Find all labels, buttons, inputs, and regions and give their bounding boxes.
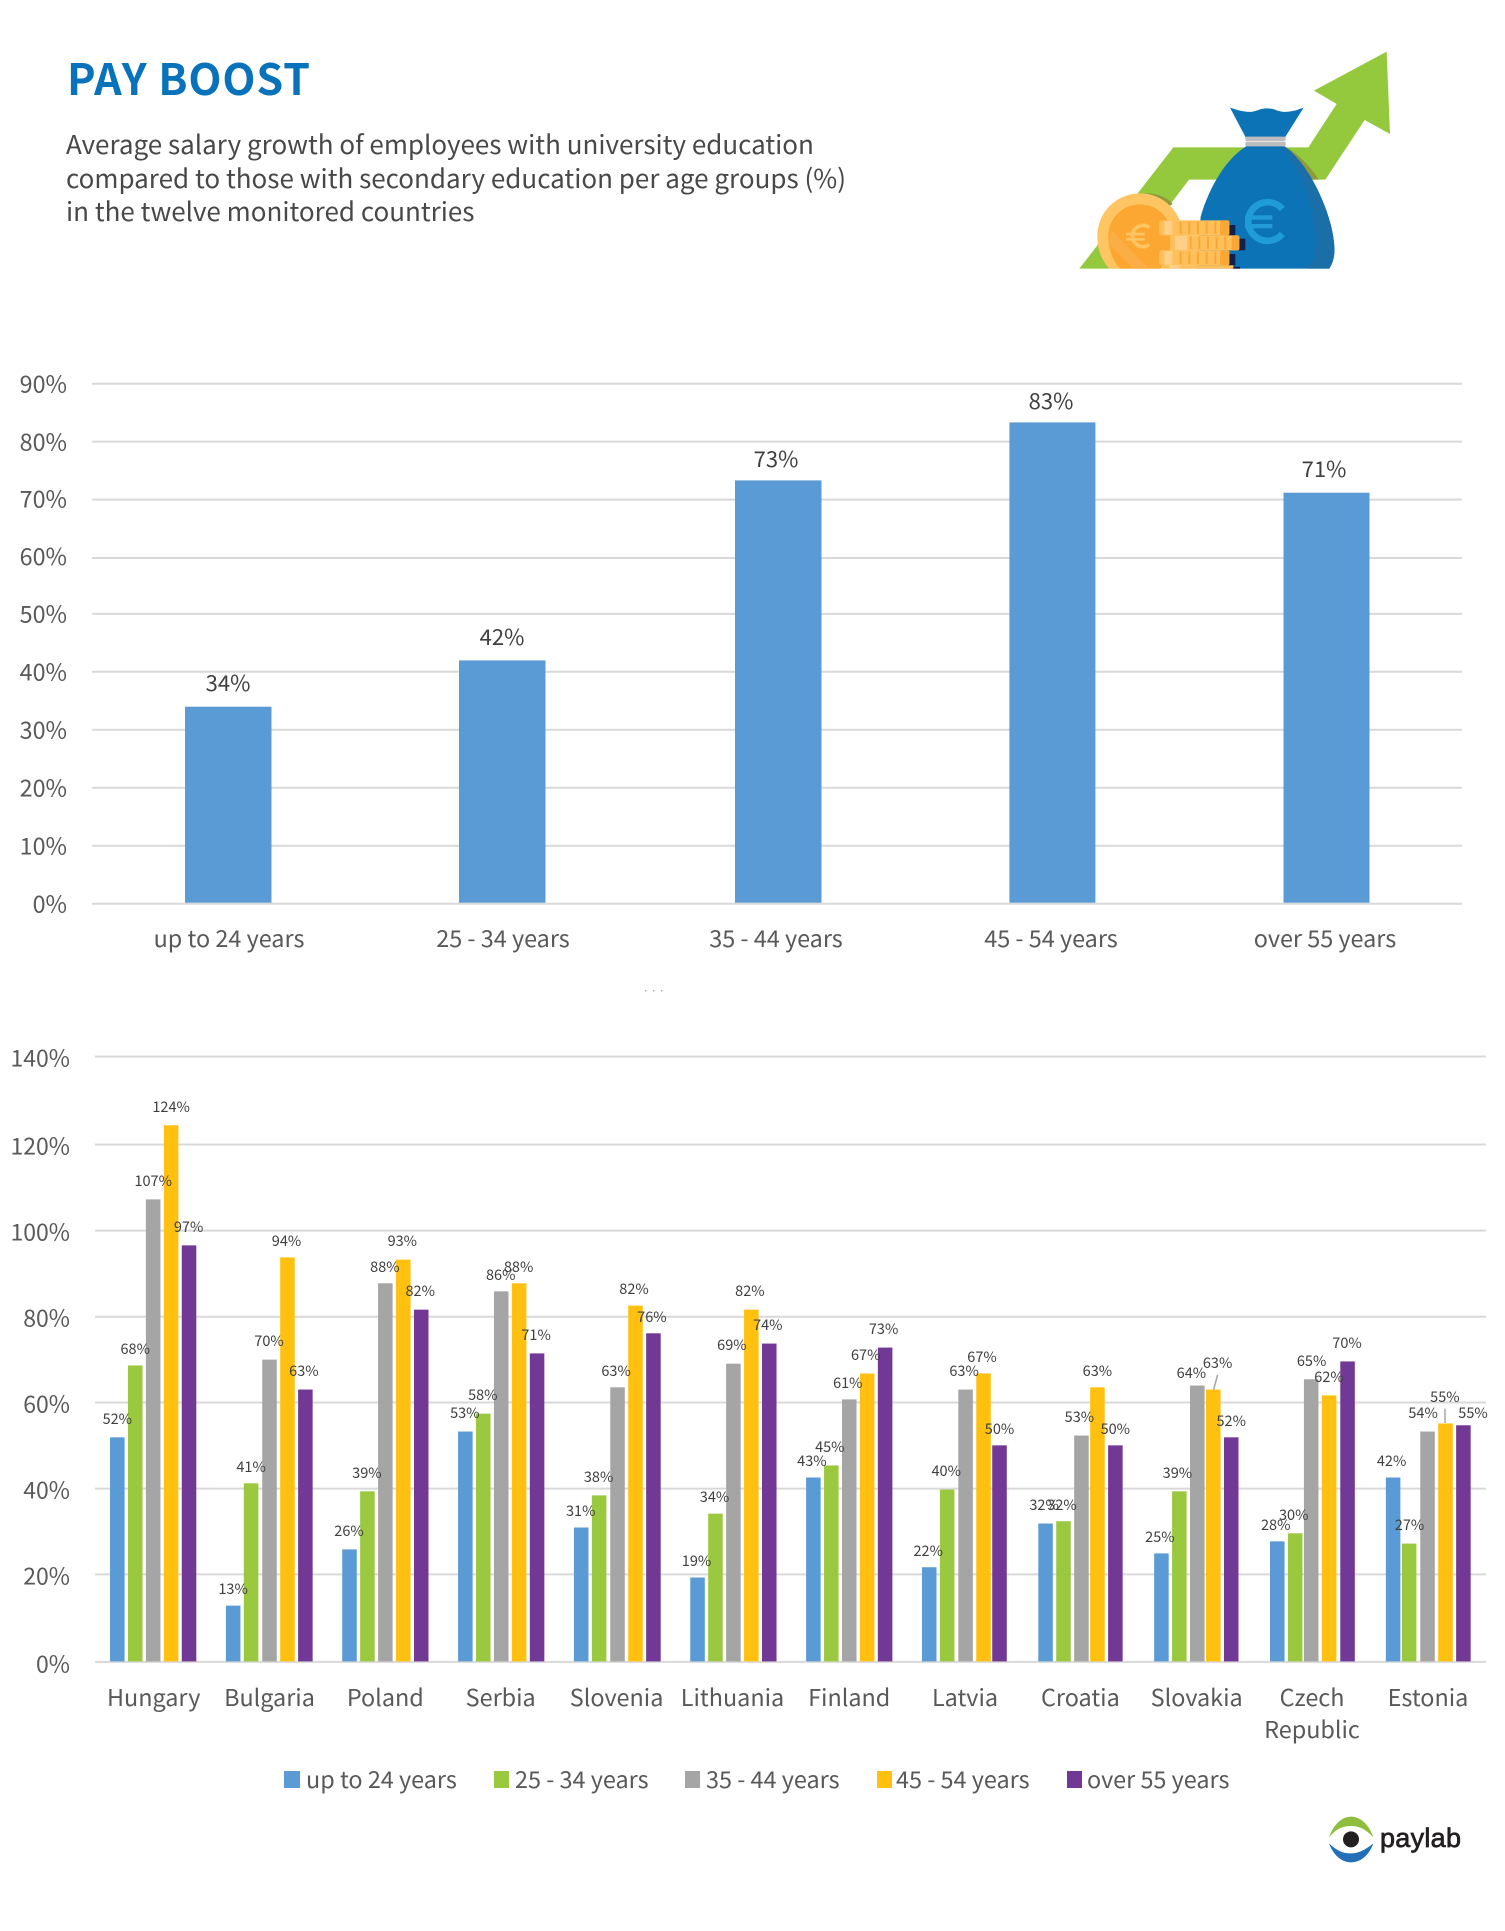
country labels: Finland [808,1679,890,1713]
value labels: 73% [754,442,798,474]
y axis labels: 40% [20,654,67,688]
data labels: 62% [1314,1366,1344,1387]
bars: Bulgaria [226,1257,313,1661]
data labels: 68% [120,1338,150,1359]
data labels: 82% [619,1278,649,1299]
y axis labels: 60% [20,538,67,572]
leader lines [1214,1375,1445,1423]
data labels: 30% [1279,1504,1308,1525]
data labels: 63% [1083,1360,1112,1381]
subtitle text block: compared to those with secondary education per age groups (%) [66,159,846,196]
category labels [154,920,1396,954]
bars: Serbia [458,1283,544,1661]
bars: Finland [806,1348,892,1661]
data labels: 82% [405,1280,435,1301]
country labels: Latvia [932,1679,998,1713]
y axis labels: 140% [11,1040,70,1074]
data labels: 58% [468,1384,498,1405]
data labels: 52% [1216,1410,1246,1431]
data labels: 22% [913,1540,943,1561]
bars [110,1125,1471,1661]
y axis labels: 30% [20,712,67,746]
legend: 25 - 34 years [515,1761,649,1795]
chart: salary growth by country and age group [11,1040,1488,1745]
bars: Latvia [922,1373,1007,1661]
data labels: 25% [1145,1526,1175,1547]
legend: 45 - 54 years [896,1761,1030,1795]
y axis labels: 60% [23,1386,70,1420]
value labels: 71% [1302,452,1346,484]
value labels: 34% [206,666,250,698]
y axis labels: 120% [11,1128,70,1162]
country labels: Croatia [1041,1679,1120,1713]
data labels: 32% [1029,1494,1059,1515]
country labels: Republic [1264,1711,1360,1745]
data labels: 88% [504,1256,533,1277]
country labels [107,1679,1468,1745]
data labels: 50% [1101,1418,1130,1439]
y axis labels: 100% [11,1214,70,1248]
y axis labels: 20% [20,770,67,804]
subtitle text block: Average salary growth of employees with university education [66,125,814,162]
data labels: 67% [851,1344,880,1365]
country labels: Estonia [1388,1679,1468,1713]
country labels: Poland [347,1679,424,1713]
country labels: Czech [1280,1679,1344,1713]
data labels: 52% [103,1408,132,1429]
data labels: 67% [967,1346,997,1367]
bars: Czech Republic [1270,1361,1355,1661]
bars: Lithuania [690,1310,777,1661]
country labels: Lithuania [681,1679,784,1713]
y axis labels: 80% [23,1300,70,1334]
legend: over 55 years [1087,1761,1229,1795]
data labels: 28% [1261,1514,1290,1535]
data labels: 32% [1047,1494,1077,1515]
data labels: 70% [1332,1332,1362,1353]
bars: Estonia [1386,1423,1471,1661]
data labels: 42% [1377,1450,1406,1471]
category labels: 45 - 54 years [984,920,1118,954]
value labels: 42% [480,620,524,652]
data labels: 61% [833,1372,863,1393]
bars: Slovakia [1154,1386,1238,1661]
y axis labels: 80% [20,424,67,458]
value labels: 83% [1029,384,1073,416]
legend: 35 - 44 years [706,1761,840,1795]
data labels: 74% [753,1314,783,1335]
value labels [206,384,1346,698]
data labels: 39% [1163,1462,1192,1483]
data labels: 65% [1297,1350,1326,1371]
data labels: 31% [566,1500,595,1521]
data labels: 70% [254,1330,284,1351]
data labels: 39% [352,1462,382,1483]
y axis labels [11,1040,70,1680]
data labels: 53% [1065,1406,1094,1427]
title: PAY BOOST [67,46,310,108]
data labels: 63% [949,1360,979,1381]
data labels: 63% [1203,1352,1232,1373]
subtitle text block [66,125,846,229]
bars: Hungary [110,1125,196,1661]
country labels: Hungary [107,1679,200,1713]
y axis labels: 70% [20,480,67,514]
bars [185,422,1370,903]
data labels: 86% [486,1264,515,1285]
data labels: 19% [682,1550,711,1571]
data labels: 64% [1177,1362,1206,1383]
y axis labels [20,366,67,920]
y axis labels: 0% [33,886,67,920]
data labels: 82% [735,1280,765,1301]
y axis labels: 40% [23,1472,70,1506]
data labels: 38% [584,1466,613,1487]
data labels: 41% [236,1456,266,1477]
data labels: 107% [134,1170,172,1191]
data labels: 45% [815,1436,845,1457]
data labels: 26% [334,1520,364,1541]
data labels: 13% [218,1578,248,1599]
data labels: 27% [1395,1514,1424,1535]
data labels: 76% [637,1306,667,1327]
category labels: over 55 years [1254,920,1396,954]
category labels: up to 24 years [154,920,304,954]
y axis labels: 50% [20,596,67,630]
bars: Slovenia [574,1306,661,1661]
data labels: 71% [521,1324,551,1345]
country labels: Serbia [466,1679,536,1713]
country labels: Slovakia [1151,1679,1243,1713]
data labels: 54% [1408,1402,1438,1423]
icon: money bag, coins and rising arrow [1079,52,1390,269]
country labels: Slovenia [570,1679,663,1713]
data labels: 97% [174,1216,203,1237]
legend: up to 24 years [306,1761,457,1795]
data labels: 88% [370,1256,400,1277]
y axis labels: 0% [36,1646,70,1680]
country labels: Bulgaria [224,1679,315,1713]
category labels: 25 - 34 years [436,920,570,954]
logo: paylab [1329,1817,1461,1862]
data labels: 63% [289,1360,319,1381]
y axis labels: 90% [20,366,67,400]
bars: Croatia [1038,1387,1123,1661]
chart: salary growth by age group [20,366,1462,954]
data labels: 93% [388,1230,417,1251]
data labels: 55% [1430,1386,1460,1407]
data labels: 55% [1458,1402,1488,1423]
legend [284,1761,1229,1795]
logo: paylab: paylab [1380,1823,1461,1853]
data labels: 124% [152,1096,190,1117]
category labels: 35 - 44 years [709,920,843,954]
data labels: 40% [931,1460,961,1481]
subtitle text block: in the twelve monitored countries [66,192,474,229]
y axis labels: 10% [20,828,67,862]
data labels: 43% [797,1450,827,1471]
data labels: 50% [985,1418,1014,1439]
data labels: 73% [869,1318,898,1339]
y axis labels: 20% [23,1558,70,1592]
data labels: 63% [601,1360,631,1381]
data labels: 69% [717,1334,747,1355]
data labels: 34% [700,1486,729,1507]
bars: Poland [342,1260,429,1661]
data labels: 53% [450,1402,480,1423]
data labels [103,1096,1488,1599]
data labels: 94% [272,1230,301,1251]
